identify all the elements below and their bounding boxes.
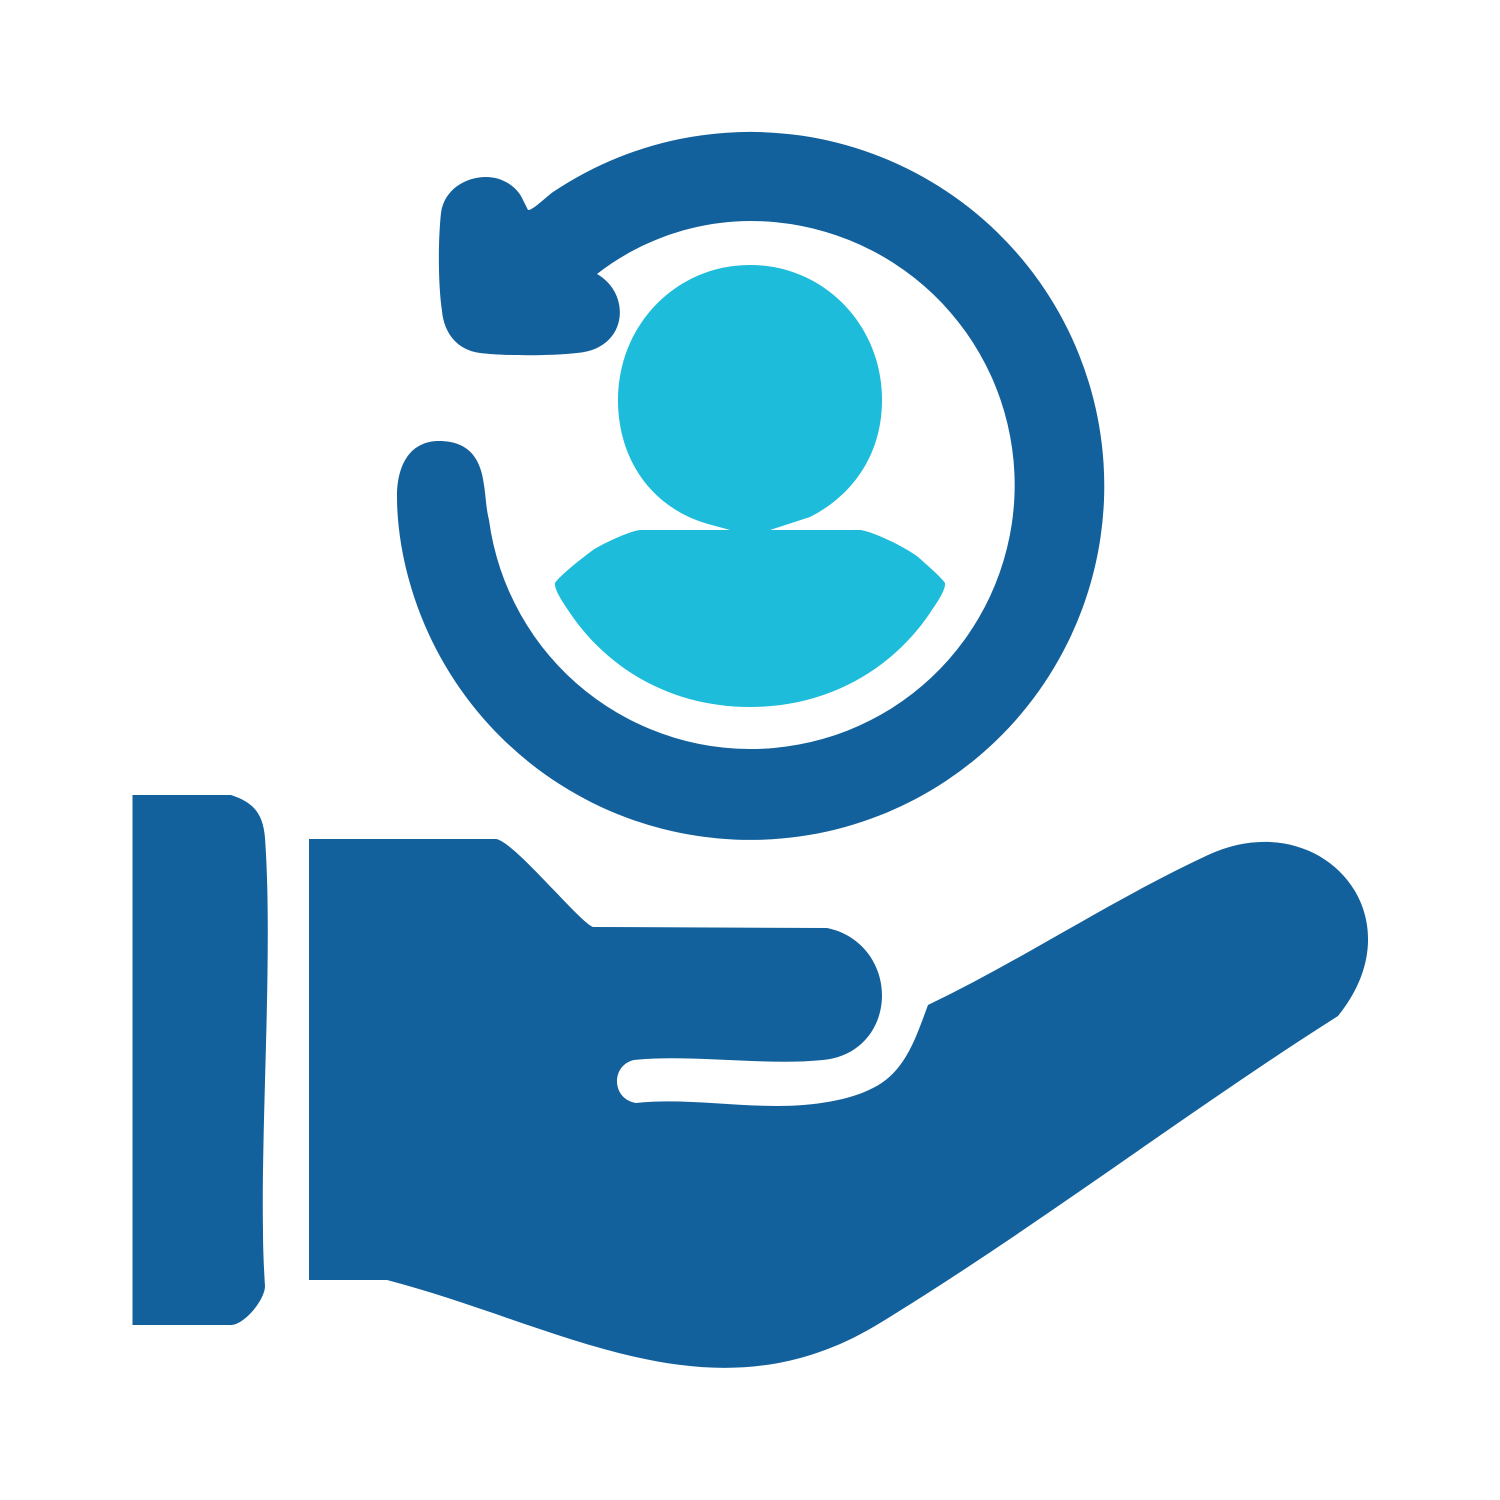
icon: person head xyxy=(618,265,882,530)
icon: hand cuff xyxy=(132,795,268,1325)
icon: person shoulders xyxy=(555,530,945,707)
icon: open hand xyxy=(309,839,1368,1368)
icon: circular return arrow xyxy=(397,132,1104,840)
